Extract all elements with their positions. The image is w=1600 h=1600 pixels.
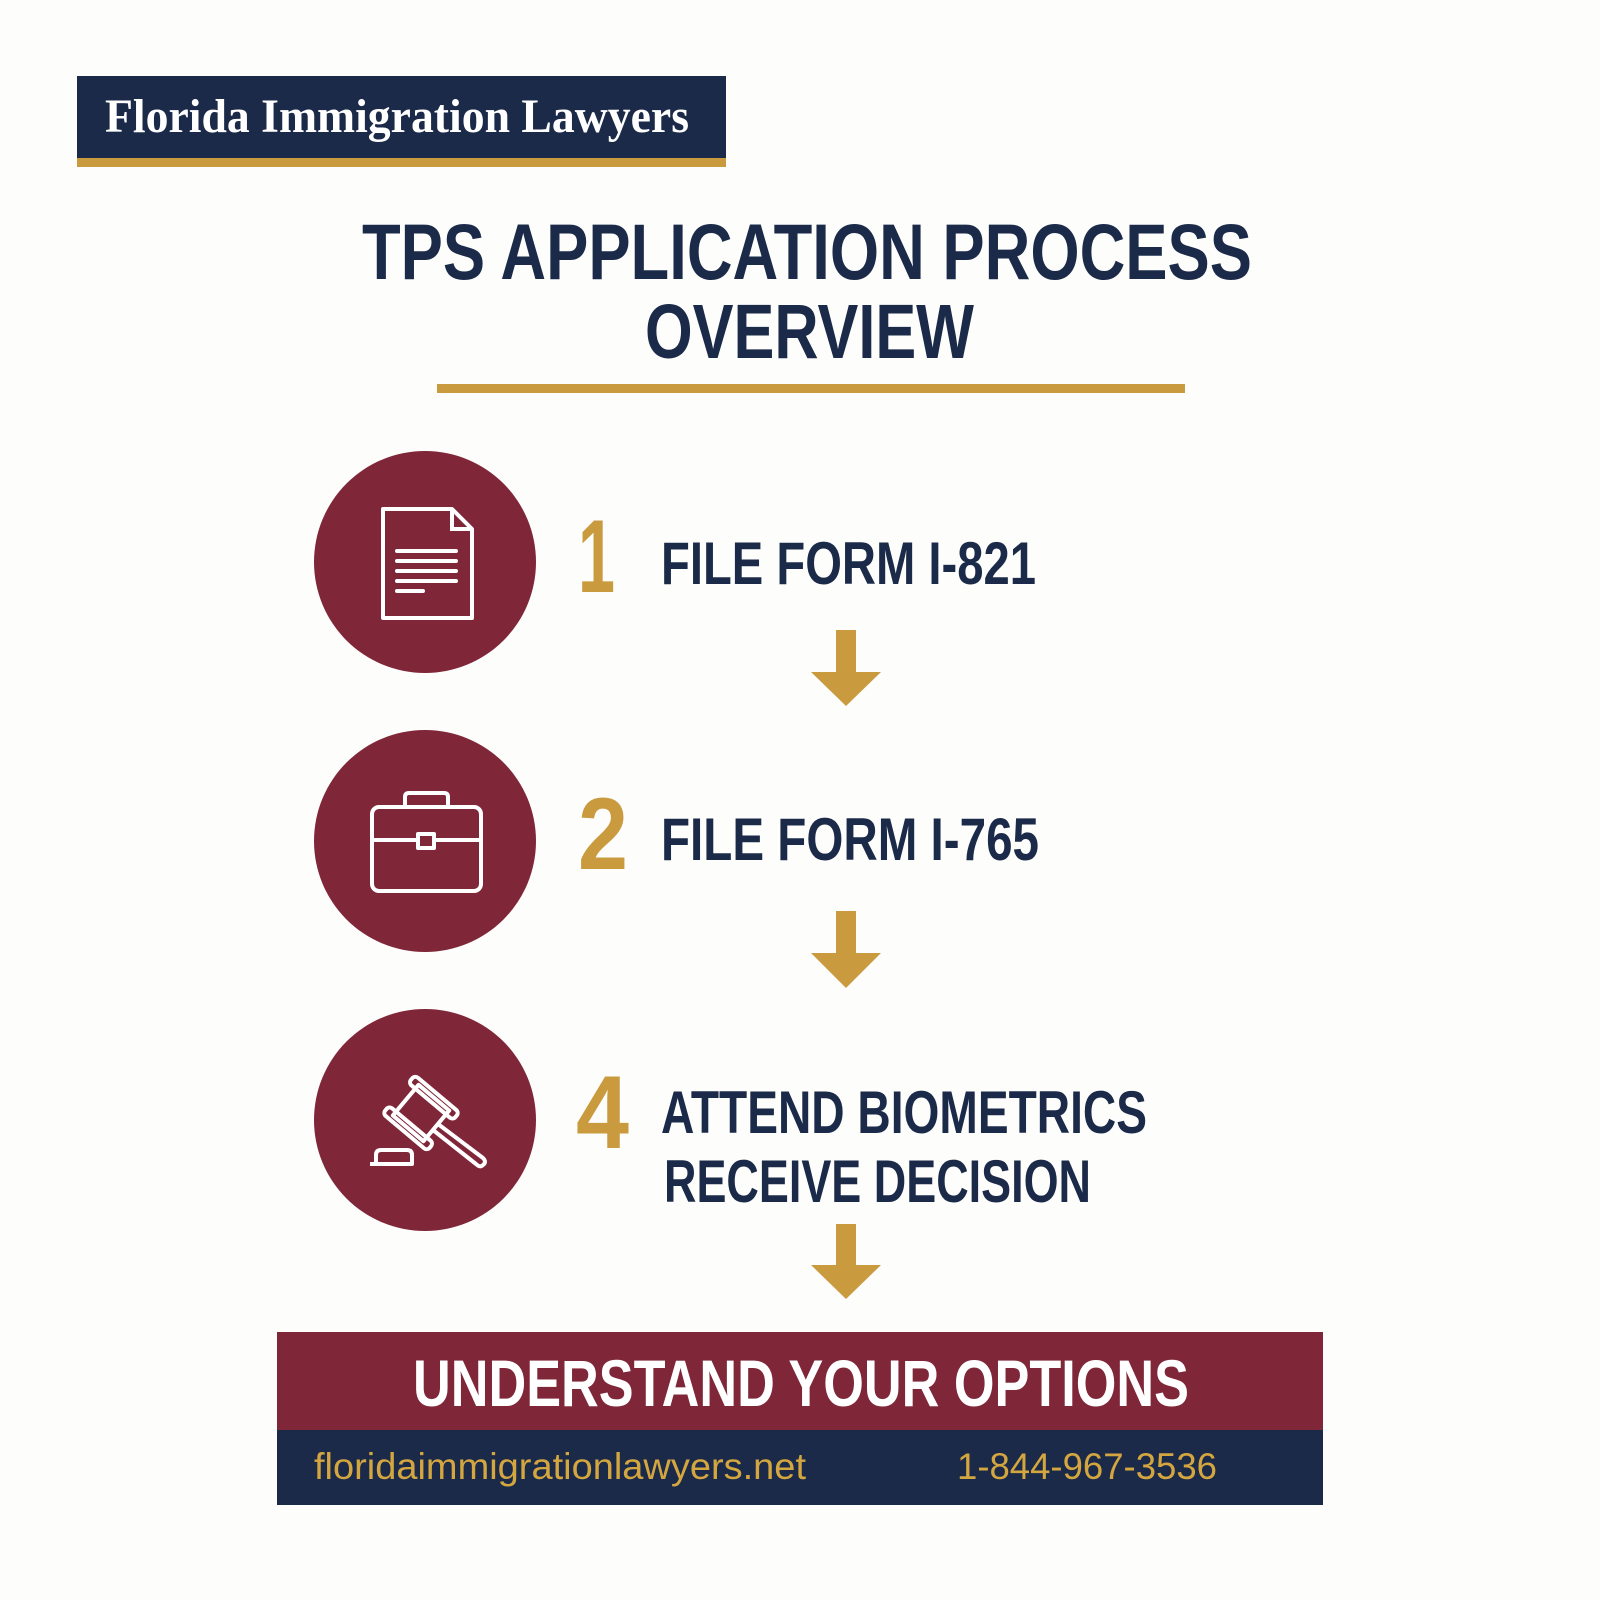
step 2: file form I-765 <box>314 730 1039 952</box>
title: OVERVIEW <box>645 289 974 375</box>
step 3: attend biometrics / receive decision <box>314 1009 1147 1231</box>
call to action banner: floridaimmigrationlawyers.net <box>314 1446 807 1487</box>
icon: document <box>314 451 536 673</box>
header: firm name badge <box>77 76 726 167</box>
step 2: file form I-765: 2 <box>578 777 628 891</box>
step 1: file form I-821: 1 <box>578 499 615 615</box>
title <box>362 207 1252 375</box>
arrow 3 <box>811 1224 881 1299</box>
step 2: file form I-765: FILE FORM I-765 <box>661 806 1039 873</box>
call to action banner: UNDERSTAND YOUR OPTIONS <box>413 1346 1189 1420</box>
step 3: attend biometrics / receive decision: ATTEND BIOMETRICS <box>661 1079 1147 1146</box>
arrow 1 <box>811 630 881 706</box>
step 1: file form I-821 <box>314 451 1036 673</box>
arrow 2 <box>811 911 881 988</box>
step 3: attend biometrics / receive decision: RECEIVE DECISION <box>664 1148 1091 1215</box>
icon: briefcase <box>314 730 536 952</box>
call to action banner <box>277 1332 1323 1505</box>
step 3: attend biometrics / receive decision: 4 <box>576 1055 629 1171</box>
icon: gavel <box>314 1009 536 1231</box>
title underline <box>437 384 1185 393</box>
call to action banner: 1-844-967-3536 <box>957 1446 1217 1487</box>
header: firm name badge: Florida Immigration Lawyers <box>105 90 689 143</box>
step 1: file form I-821: FILE FORM I-821 <box>661 530 1036 597</box>
title: TPS APPLICATION PROCESS <box>362 207 1252 296</box>
